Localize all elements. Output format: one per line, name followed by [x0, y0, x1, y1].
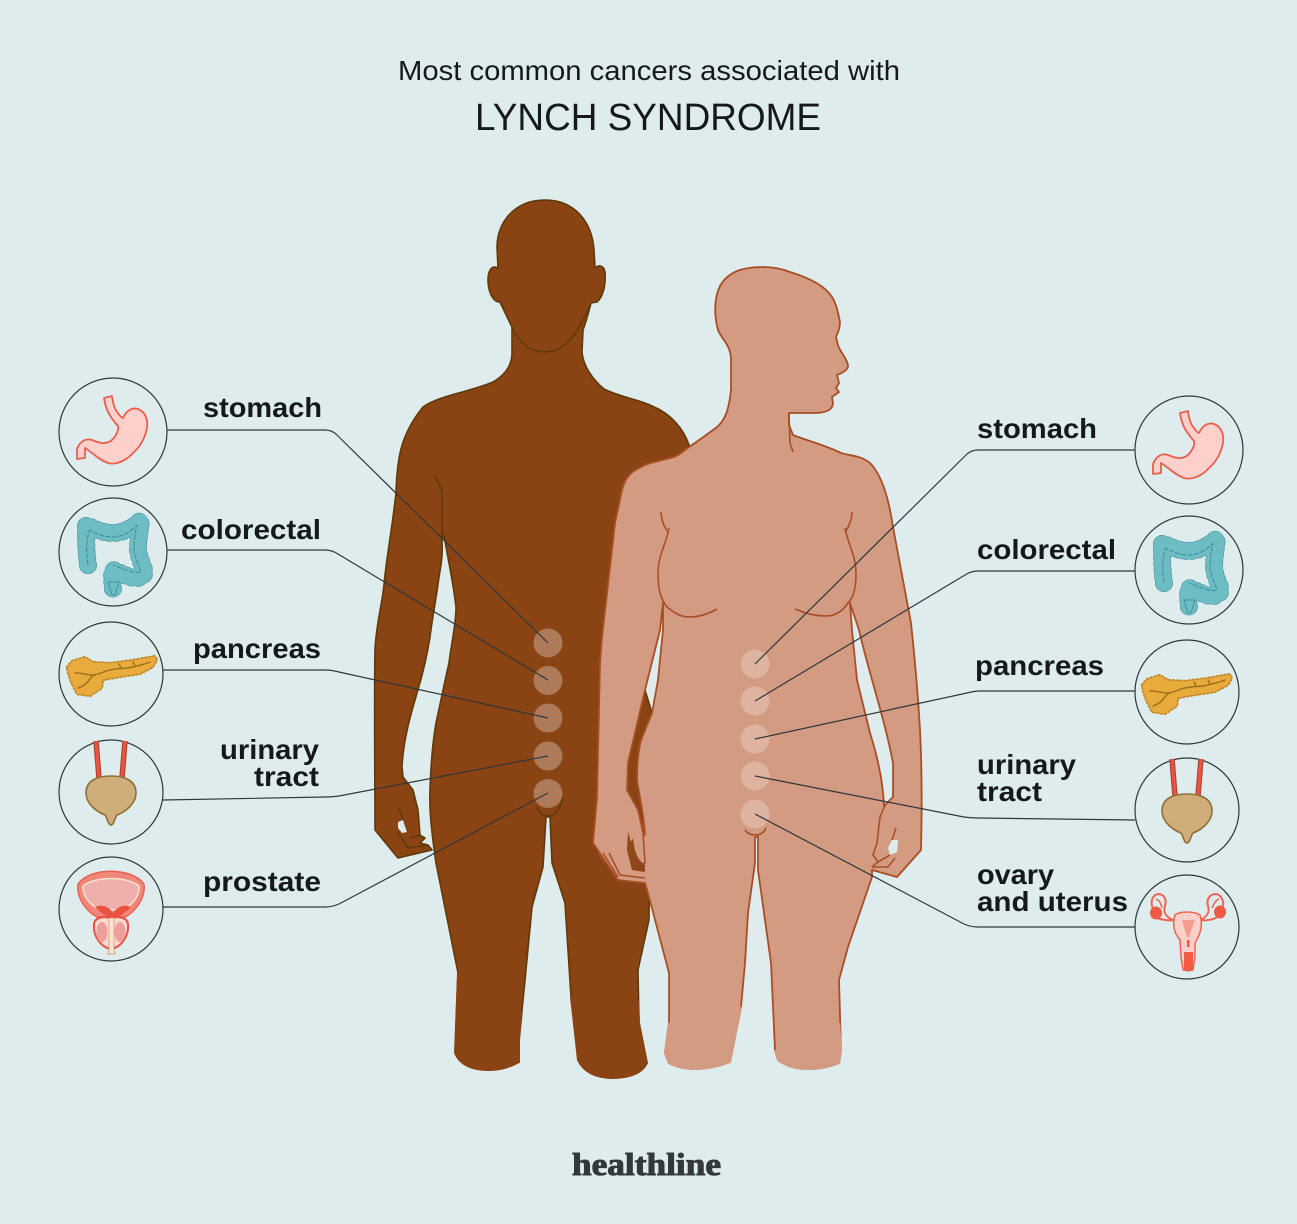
- label: ovary and uterus: [977, 859, 1128, 917]
- label: ovary and uterus: ovary: [977, 859, 1055, 890]
- woman torso and hand contour lines: [598, 413, 896, 878]
- icon: colon: [59, 498, 167, 606]
- item: pancreas right: [975, 640, 1239, 744]
- item: colorectal left: [59, 498, 321, 606]
- woman silhouette: [593, 267, 922, 1069]
- woman left hand fold: [627, 832, 645, 872]
- label: urinary tract: urinary: [220, 734, 320, 765]
- label: stomach: stomach: [977, 413, 1097, 444]
- label: ovary and uterus: and uterus: [977, 886, 1128, 917]
- marker dots: woman: [740, 650, 770, 828]
- label: stomach: stomach: [203, 392, 322, 423]
- icon: colon: [1135, 516, 1243, 624]
- item: ovary and uterus right: [977, 859, 1239, 979]
- label: prostate: prostate: [203, 866, 321, 897]
- icon: pancreas: [1135, 640, 1239, 744]
- marker dots: man: [534, 628, 562, 808]
- figure: man: [375, 200, 689, 1078]
- icon: prostate: [59, 857, 163, 961]
- label: pancreas: pancreas: [193, 633, 321, 664]
- man silhouette: [375, 200, 689, 1078]
- man jaw and body contour lines: [398, 302, 591, 848]
- label: urinary tract: tract: [977, 776, 1042, 807]
- item: urinary tract left: [59, 734, 320, 844]
- icon: stomach: [59, 378, 167, 486]
- item: colorectal right: [977, 516, 1243, 624]
- icon: ovary and uterus: [1135, 875, 1239, 979]
- title line one: Most common cancers associated with: [398, 55, 900, 86]
- leader lines: right: [755, 450, 1135, 927]
- item: stomach right: [977, 396, 1243, 504]
- label: urinary tract: tract: [254, 761, 319, 792]
- woman lower legs without outline: [665, 1007, 841, 1069]
- item: pancreas left: [59, 622, 321, 726]
- icon: pancreas: [59, 622, 163, 726]
- item: prostate left: [59, 857, 321, 961]
- leader lines: left: [163, 430, 548, 907]
- logo: healthline: healthline: [572, 1146, 721, 1182]
- item: urinary tract right: [977, 749, 1239, 862]
- woman hand gap: [888, 840, 898, 855]
- label: colorectal: colorectal: [181, 514, 321, 545]
- man lower legs without outline: [455, 973, 647, 1078]
- title: [398, 55, 900, 139]
- label: urinary tract: [220, 734, 320, 792]
- figure: woman: [593, 267, 922, 1069]
- item: stomach left: [59, 378, 322, 486]
- label: urinary tract: [977, 749, 1077, 807]
- label: colorectal: colorectal: [977, 534, 1116, 565]
- title line two: LYNCH SYNDROME: [475, 97, 821, 139]
- icon: bladder: [59, 740, 163, 844]
- label: urinary tract: urinary: [977, 749, 1077, 780]
- icon: bladder: [1135, 758, 1239, 862]
- man hand gap: [398, 820, 407, 833]
- label: pancreas: pancreas: [975, 650, 1104, 681]
- icon: stomach: [1135, 396, 1243, 504]
